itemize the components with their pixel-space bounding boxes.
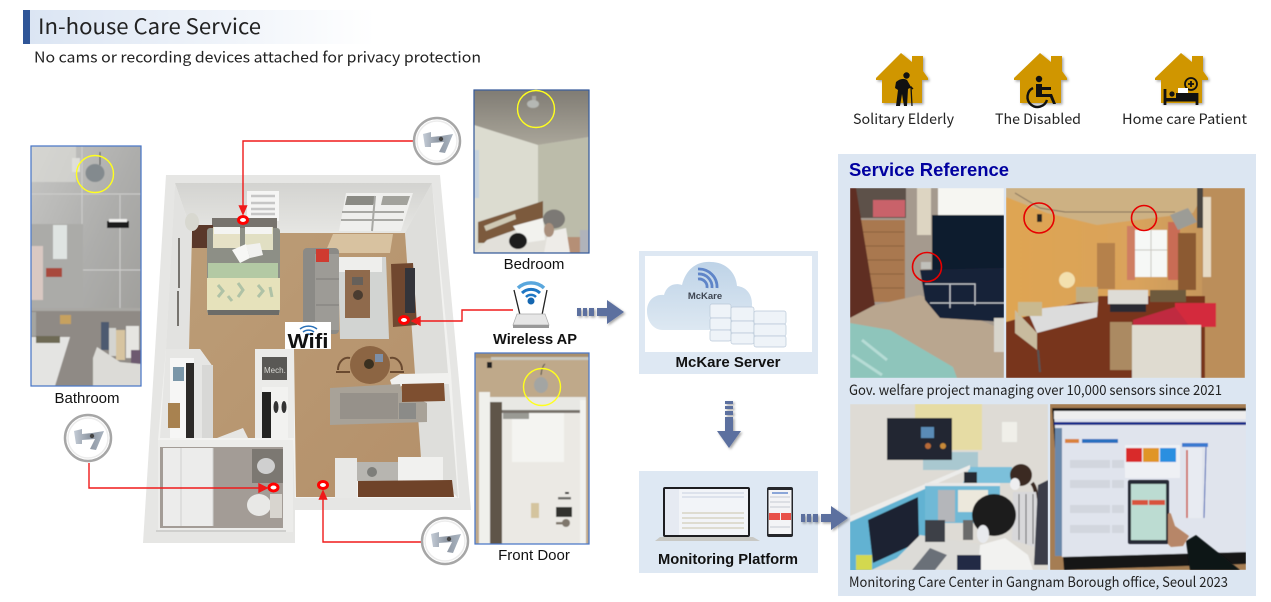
title banner (23, 10, 375, 44)
caption: bathroom: Bathroom (54, 390, 120, 407)
closets: Mech. (264, 366, 286, 375)
caption: welfare project: Gov. welfare project managing over 10,000 sensors since 2021 (849, 380, 1222, 400)
photo: bedroom (474, 90, 589, 253)
icon: home care patient (1155, 53, 1208, 105)
bed (185, 213, 280, 315)
red sensor connector lines (89, 141, 513, 542)
arrow: platform to service reference (801, 506, 848, 530)
kitchen (330, 373, 454, 498)
windows (247, 191, 413, 253)
photo: ward room (1006, 188, 1245, 378)
panel: McKare server: McKare Server (676, 354, 781, 371)
caption: care center: Monitoring Care Center in Gangnam Borough office, Seoul 2023 (849, 572, 1228, 592)
closets (160, 349, 294, 438)
panel: McKare server (639, 251, 818, 374)
icon: phone (767, 487, 793, 537)
sensor icon: front door (422, 518, 468, 564)
photo: front door (475, 353, 589, 544)
TV stand (391, 263, 417, 327)
icon: cloud with servers: McKare (688, 291, 722, 302)
panel: monitoring platform: Monitoring Platform (658, 552, 798, 568)
label: home care patient: Home care Patient (1122, 109, 1248, 129)
label: the disabled: The Disabled (995, 109, 1081, 129)
sofa and rug (303, 248, 389, 339)
label: solitary elderly: Solitary Elderly (853, 109, 955, 129)
caption: bedroom: Bedroom (504, 256, 564, 273)
dining table (336, 346, 404, 384)
panel: service reference (838, 154, 1256, 596)
icon: cloud with servers (647, 262, 786, 347)
sensor markers on the plan (238, 216, 408, 491)
title banner: In-house Care Service (38, 11, 261, 41)
caption: front door: Front Door (498, 547, 570, 564)
sensor icon: bedroom (414, 118, 460, 164)
bathroom plan (156, 440, 293, 532)
photo: care center office (850, 404, 1048, 580)
arrow: server to platform (717, 401, 741, 448)
icon: the disabled (1014, 53, 1067, 107)
icon: laptop (655, 487, 760, 541)
arrow: AP to server (577, 300, 624, 324)
subtitle: No cams or recording devices attached for privacy protection (34, 46, 481, 68)
caption: wireless AP: Wireless AP (493, 332, 577, 348)
icon: wireless AP (513, 283, 549, 328)
heading: service reference: Service Reference (849, 160, 1009, 180)
photo: monitoring screen and tablet (1050, 404, 1246, 570)
wifi badge (285, 322, 331, 353)
sensor icon: bathroom (65, 415, 111, 461)
panel: monitoring platform (639, 471, 818, 573)
photo: bathroom (31, 146, 141, 386)
wifi badge: Wifi (288, 331, 328, 353)
floor plan (143, 175, 471, 543)
icon: solitary elderly (876, 53, 928, 106)
photo: room with TV stand (850, 188, 1004, 378)
